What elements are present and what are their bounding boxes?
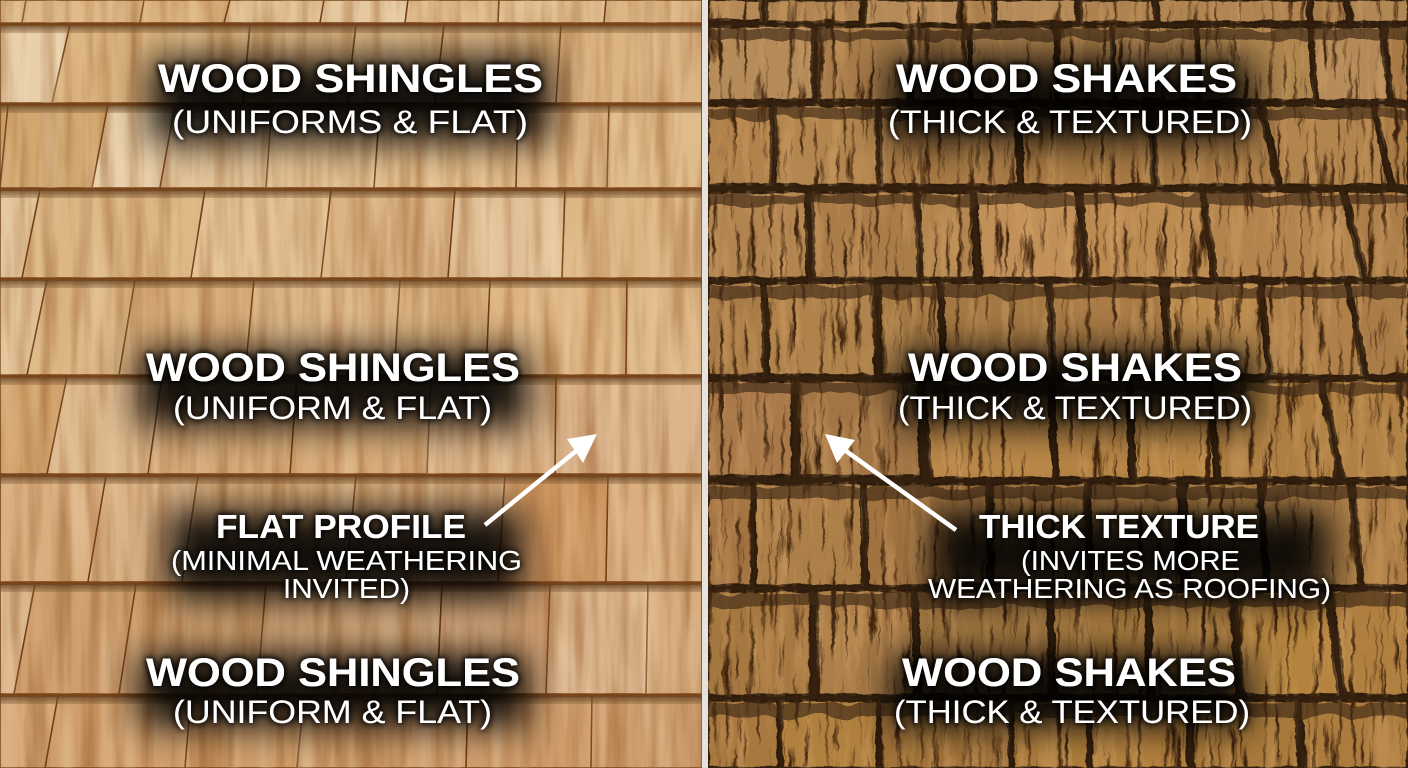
shingle row 3: [0, 105, 702, 188]
center divider: [702, 0, 708, 768]
arrow: thick texture: [825, 434, 956, 530]
text glow: dark halos behind the labels: [138, 58, 1330, 727]
label: wood shakes middle: (THICK & TEXTURED): [898, 390, 1252, 426]
label: wood shingles top: [158, 57, 543, 140]
callout: flat profile: FLAT PROFILE: [216, 508, 466, 545]
label: wood shakes top: (THICK & TEXTURED): [888, 104, 1252, 140]
label: wood shingles bottom: (UNIFORM & FLAT): [173, 694, 492, 730]
panel: wood shingles roof: [0, 0, 702, 768]
shingle row 9: [0, 696, 702, 768]
wood grain on shingles: [0, 0, 702, 768]
callout: thick texture: THICK TEXTURE: [979, 508, 1259, 545]
row butt lines: [0, 23, 702, 696]
label: wood shakes bottom: WOOD SHAKES: [902, 651, 1236, 695]
callout: flat profile: (MINIMAL WEATHERING: [171, 545, 522, 576]
shingle row 4: [0, 190, 702, 278]
callout: flat profile: [171, 508, 522, 604]
label: wood shingles middle: WOOD SHINGLES: [146, 346, 520, 390]
shingle row 7: [0, 476, 702, 582]
shingle row shadows: [0, 25, 702, 704]
label: wood shingles middle: (UNIFORM & FLAT): [173, 390, 492, 426]
shake rows: [708, 0, 1408, 768]
label: wood shingles top: WOOD SHINGLES: [158, 57, 543, 101]
label: wood shakes top: WOOD SHAKES: [896, 57, 1237, 101]
shingle row 1: [0, 0, 702, 23]
label: wood shingles bottom: WOOD SHINGLES: [146, 651, 520, 695]
callout: thick texture: [928, 508, 1331, 604]
ragged overhang shadows: [708, 29, 1408, 717]
callout: thick texture: WEATHERING AS ROOFING): [928, 573, 1331, 604]
label: wood shingles bottom: [146, 651, 520, 730]
panel: wood shakes roof: [708, 0, 1408, 768]
label: wood shakes top: [888, 57, 1252, 140]
label: wood shakes middle: WOOD SHAKES: [908, 346, 1242, 390]
arrow: flat profile: [485, 434, 597, 525]
callout: flat profile: INVITED): [283, 573, 410, 604]
callout: thick texture: (INVITES MORE: [1021, 545, 1240, 576]
label: wood shingles middle: [146, 346, 520, 426]
shingle row 8: [0, 584, 702, 694]
label: wood shingles top: (UNIFORMS & FLAT): [172, 104, 528, 140]
label: wood shakes bottom: [894, 651, 1250, 730]
shingle row 5: [0, 280, 702, 375]
shingle row 2: [0, 25, 702, 103]
shingle row 6: [0, 377, 702, 474]
label: wood shakes bottom: (THICK & TEXTURED): [894, 694, 1250, 730]
label: wood shakes middle: [898, 346, 1252, 426]
